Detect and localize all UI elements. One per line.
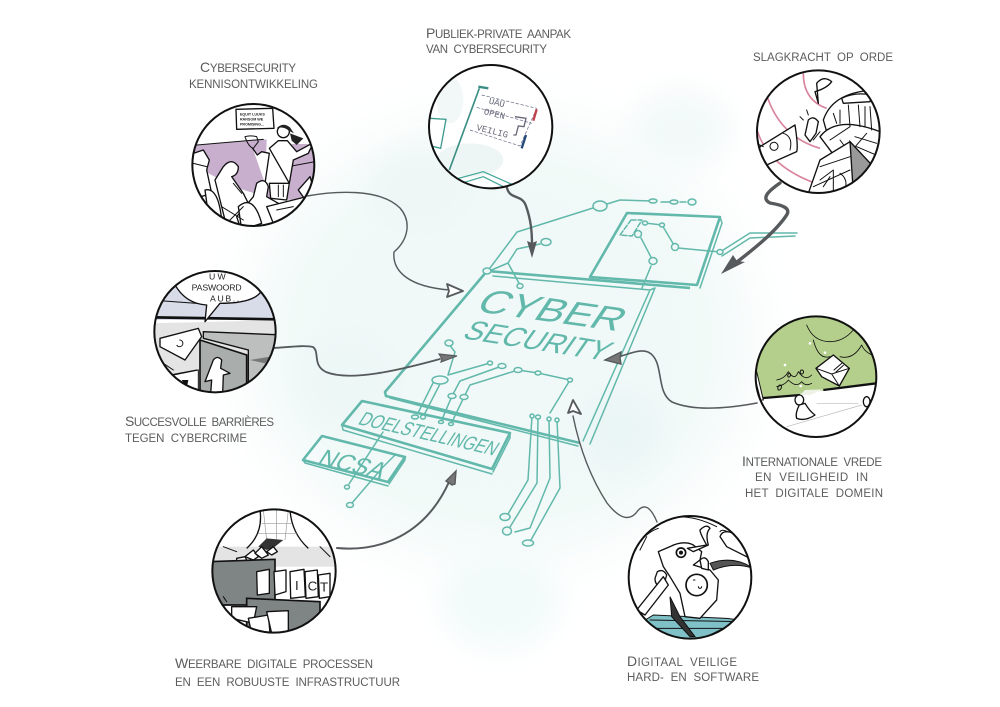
circle: robuuste infrastructuur bbox=[210, 509, 340, 637]
circle: succesvolle barrieres bbox=[150, 266, 283, 393]
circuit board diagram bbox=[303, 199, 797, 546]
arrow: kennisontwikkeling to board bbox=[307, 192, 463, 297]
label: publiek-private aanpak: VAN CYBERSECURITY bbox=[426, 44, 547, 56]
circle: robuuste infrastructuur: C bbox=[308, 579, 318, 594]
circle: kennisontwikkeling classroom: PROMISING... bbox=[240, 123, 264, 127]
arrow: infrastructuur to board bbox=[337, 471, 456, 549]
label: succesvolle barrieres: SUCCESVOLLE BARRIÈRES bbox=[125, 413, 274, 429]
arrow: hard- en software to board bbox=[568, 400, 657, 522]
label: succesvolle barrieres bbox=[125, 413, 274, 445]
circle: publiek-private flag: OPEN bbox=[483, 107, 506, 122]
label: weerbare digitale processen: EN EEN ROBUUSTE INFRASTRUCTUUR bbox=[175, 677, 400, 689]
label: publiek-private aanpak bbox=[426, 25, 571, 56]
label: publiek-private aanpak: PUBLIEK-PRIVATE AANPAK bbox=[426, 25, 571, 41]
circle: internationale vrede cube bbox=[753, 313, 877, 437]
arrow: barrieres to board bbox=[274, 346, 457, 376]
circle: succesvolle barrieres: UW bbox=[209, 271, 226, 281]
ncsa chip: NCSA bbox=[313, 446, 393, 484]
doelstellingen chip: DOELSTELLINGEN bbox=[354, 408, 504, 460]
main cyber security board bbox=[385, 271, 690, 446]
circle: hard- en software monkey bbox=[628, 516, 753, 640]
label: digitaal veilige hard- en software bbox=[627, 653, 759, 684]
label: digitaal veilige hard- en software: HARD- EN SOFTWARE bbox=[627, 672, 759, 684]
security title: SECURITY bbox=[457, 316, 619, 367]
circle: robuuste infrastructuur: I bbox=[295, 578, 299, 593]
label: cybersecurity kennisontwikkeling: CYBERSECURITY bbox=[200, 59, 296, 75]
circle: succesvolle barrieres: PASWOORD bbox=[192, 283, 242, 293]
arrow: internationale vrede to board bbox=[605, 351, 757, 408]
label: internationale vrede bbox=[742, 453, 883, 500]
upper traces bbox=[483, 199, 797, 288]
circle: publiek-private flag: UAU bbox=[488, 97, 506, 110]
label: cybersecurity kennisontwikkeling: KENNISONTWIKKELING bbox=[189, 79, 318, 91]
cyber title: CYBER bbox=[469, 282, 636, 338]
label: internationale vrede: EN VEILIGHEID IN bbox=[755, 472, 868, 484]
label: internationale vrede: INTERNATIONALE VREDE bbox=[742, 453, 882, 469]
doelstellingen chip bbox=[342, 401, 510, 474]
circle: slagkracht megaphone bbox=[750, 70, 883, 193]
circle: publiek-private flag: VEILIG bbox=[475, 123, 509, 141]
label: internationale vrede: HET DIGITALE DOMEIN bbox=[745, 488, 883, 500]
label: succesvolle barrieres: TEGEN CYBERCRIME bbox=[125, 433, 247, 445]
lower traces bbox=[344, 340, 572, 546]
circle: kennisontwikkeling classroom: RANSOM WE bbox=[240, 117, 264, 121]
upper chip bbox=[590, 213, 722, 288]
ncsa chip bbox=[303, 436, 405, 486]
label: weerbare digitale processen: WEERBARE DIGITALE PROCESSEN bbox=[175, 655, 373, 671]
arrow: slagkracht to board bbox=[721, 183, 788, 274]
circle: kennisontwikkeling classroom: EQUIT LUUKS bbox=[240, 113, 265, 117]
label: digitaal veilige hard- en software: DIGITAAL VEILIGE bbox=[627, 653, 737, 669]
circle: kennisontwikkeling classroom bbox=[190, 104, 317, 230]
arrow: publiek-private to board bbox=[507, 188, 537, 258]
label: slagkracht op orde: SLAGKRACHT OP ORDE bbox=[753, 52, 893, 64]
circle: publiek-private flag bbox=[427, 65, 552, 188]
circle: robuuste infrastructuur: T bbox=[320, 580, 328, 595]
circle: succesvolle barrieres: AUB... bbox=[210, 293, 243, 303]
label: cybersecurity kennisontwikkeling bbox=[189, 59, 318, 91]
label: weerbare digitale processen bbox=[175, 655, 400, 689]
